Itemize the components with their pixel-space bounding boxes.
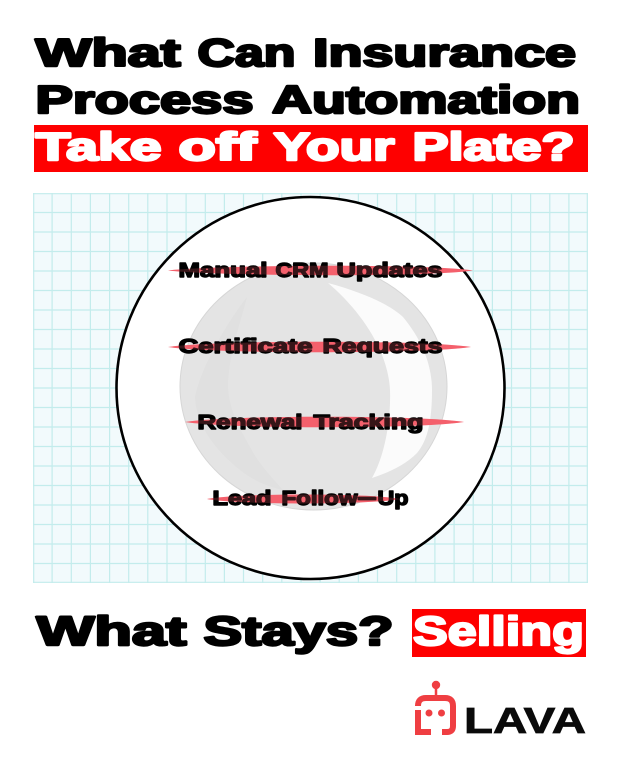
task: Manual CRM Updates: Manual — [178, 260, 268, 282]
task: Lead Follow-Up: Up — [378, 488, 408, 510]
task: Certificate Requests: Certificate — [178, 336, 312, 358]
task: Lead Follow-Up: Follow — [282, 488, 358, 510]
title line 1: Insurance — [313, 32, 576, 75]
wordmark: LAVA — [464, 700, 586, 741]
task: Manual CRM Updates — [168, 260, 473, 282]
heading: What Stays?: Stays? — [204, 608, 394, 654]
plate inner well — [180, 263, 447, 510]
title line 2: Automation — [272, 79, 580, 122]
task: Lead Follow-Up: – — [358, 487, 376, 509]
heading: What Stays? — [36, 608, 394, 654]
task: Renewal Tracking: Tracking — [314, 412, 424, 434]
badge text: Selling — [413, 608, 584, 654]
title line 2: Process — [36, 79, 254, 122]
task: Certificate Requests — [168, 336, 471, 358]
plate shadow — [195, 297, 283, 490]
title highlight banner — [34, 125, 588, 172]
task: Lead Follow-Up: Lead — [212, 488, 272, 510]
task: Certificate Requests: Requests — [322, 336, 442, 358]
answer badge: Selling — [412, 608, 586, 657]
plate illustration — [116, 197, 504, 579]
task: Manual CRM Updates: Updates — [336, 260, 442, 282]
task: Lead Follow-Up — [207, 487, 408, 510]
LAVA logo — [418, 681, 586, 741]
title line 1: What — [36, 32, 181, 75]
banner text — [36, 126, 574, 169]
task: Manual CRM Updates: CRM — [276, 260, 328, 282]
grid background panel — [33, 193, 588, 583]
task: Renewal Tracking: Renewal — [198, 412, 302, 434]
heading: What Stays?: What — [36, 608, 187, 654]
banner text: Plate? — [412, 126, 574, 169]
plate highlight — [328, 283, 432, 478]
title — [36, 32, 580, 122]
title line 1: Can — [198, 32, 296, 75]
icon: robot head — [418, 681, 453, 732]
banner text: Your — [274, 126, 394, 169]
banner text: off — [178, 126, 258, 169]
title line 1 — [36, 32, 576, 75]
task: Renewal Tracking — [185, 412, 464, 434]
plate outer circle — [116, 197, 504, 579]
banner text: Take — [36, 126, 162, 169]
title line 2 — [36, 79, 580, 122]
